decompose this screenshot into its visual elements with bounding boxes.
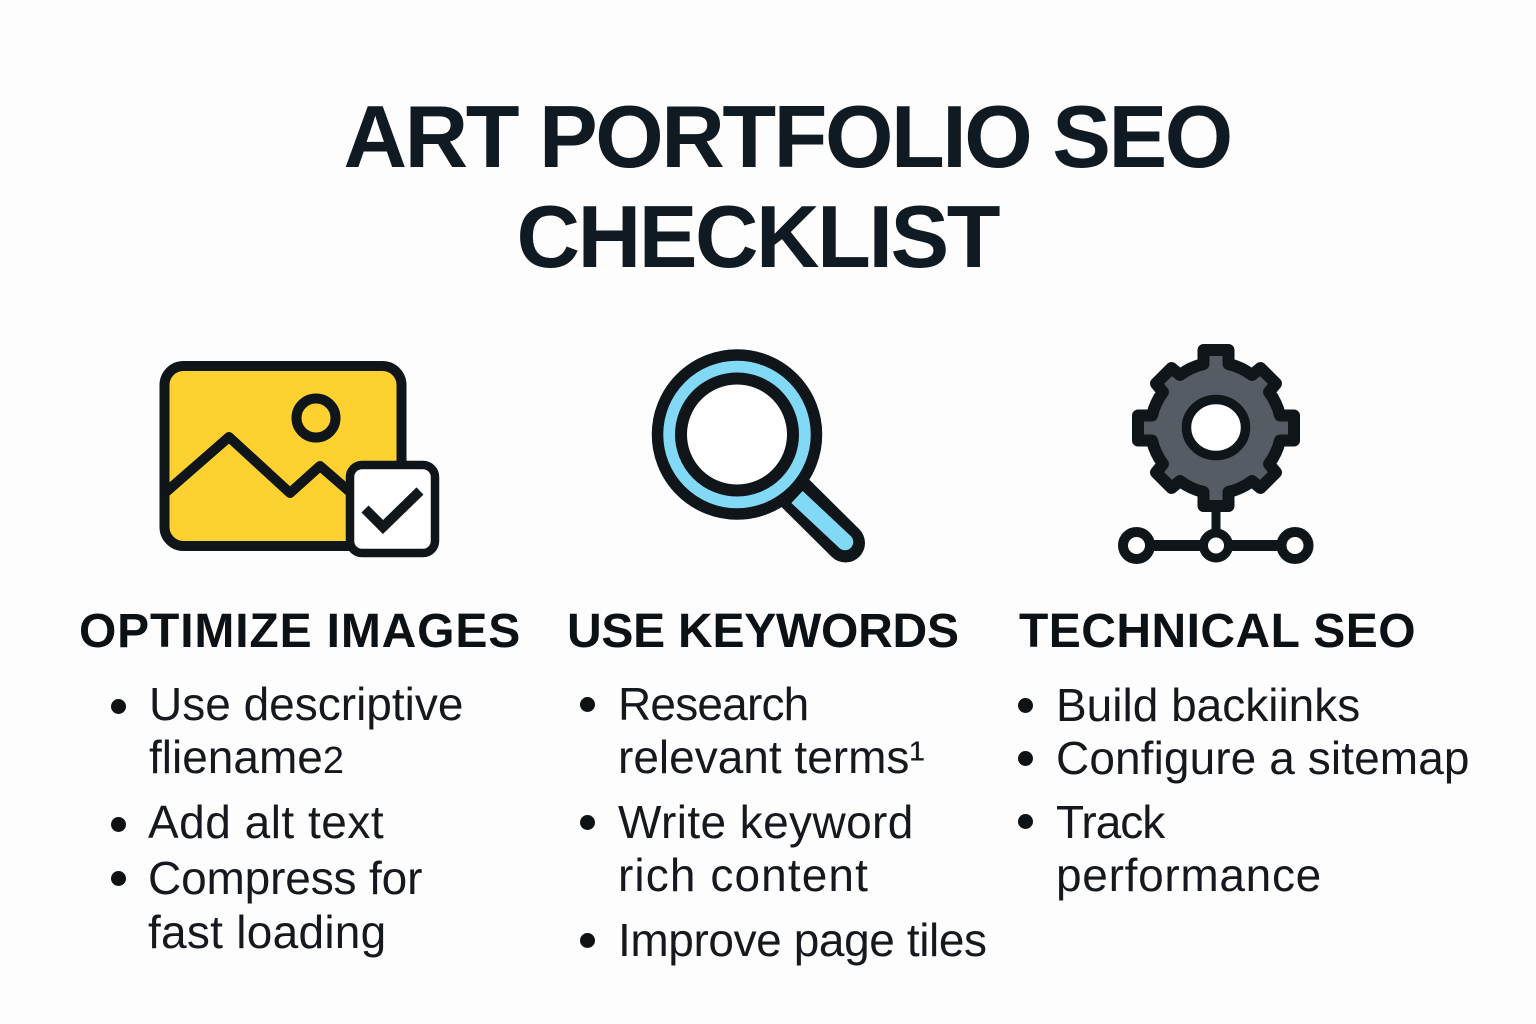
- list item: compress for fast loading: [111, 852, 422, 958]
- heading: technical seo: TECHNICAL SEO: [1019, 605, 1416, 658]
- list item: build backlinks: Build backiinks: [1056, 679, 1360, 731]
- list item: use descriptive filename: fliename2: [149, 731, 344, 783]
- list: technical seo: [1018, 679, 1470, 901]
- list item: write keyword rich content: Write keyword: [618, 796, 914, 848]
- list item: write keyword rich content: rich content: [618, 849, 869, 901]
- icon: gear with network nodes: [1123, 350, 1308, 559]
- list: use keywords: [580, 678, 987, 966]
- list item: configure a sitemap: Configure a sitemap: [1056, 732, 1470, 784]
- list item: improve page tiles: Improve page tiles: [618, 914, 987, 966]
- list item: compress for fast loading: fast loading: [148, 906, 387, 958]
- list item: track performance: [1018, 796, 1322, 901]
- title: ART PORTFOLIO SEO: [344, 87, 1231, 186]
- list item: use descriptive filename: [111, 678, 463, 783]
- heading: optimize images: OPTIMIZE IMAGES: [79, 605, 521, 658]
- list: optimize images: [111, 678, 463, 958]
- list item: add alt text: Add alt text: [148, 796, 384, 848]
- list item: compress for fast loading: Compress for: [148, 852, 422, 904]
- list item: use descriptive filename: Use descriptive: [149, 678, 463, 730]
- icon: magnifying glass: [658, 355, 853, 550]
- list item: research relevant terms: [580, 678, 925, 783]
- icon: image with checkmark: [164, 366, 435, 553]
- list item: track performance: Track: [1056, 796, 1164, 848]
- list item: write keyword rich content: [580, 796, 914, 901]
- title: [344, 87, 1231, 286]
- list item: track performance: performance: [1056, 849, 1322, 901]
- title: CHECKLIST: [516, 187, 998, 286]
- list item: research relevant terms: relevant terms¹: [618, 731, 925, 783]
- heading: use keywords: USE KEYWORDS: [567, 605, 959, 658]
- list item: research relevant terms: Research: [618, 678, 808, 730]
